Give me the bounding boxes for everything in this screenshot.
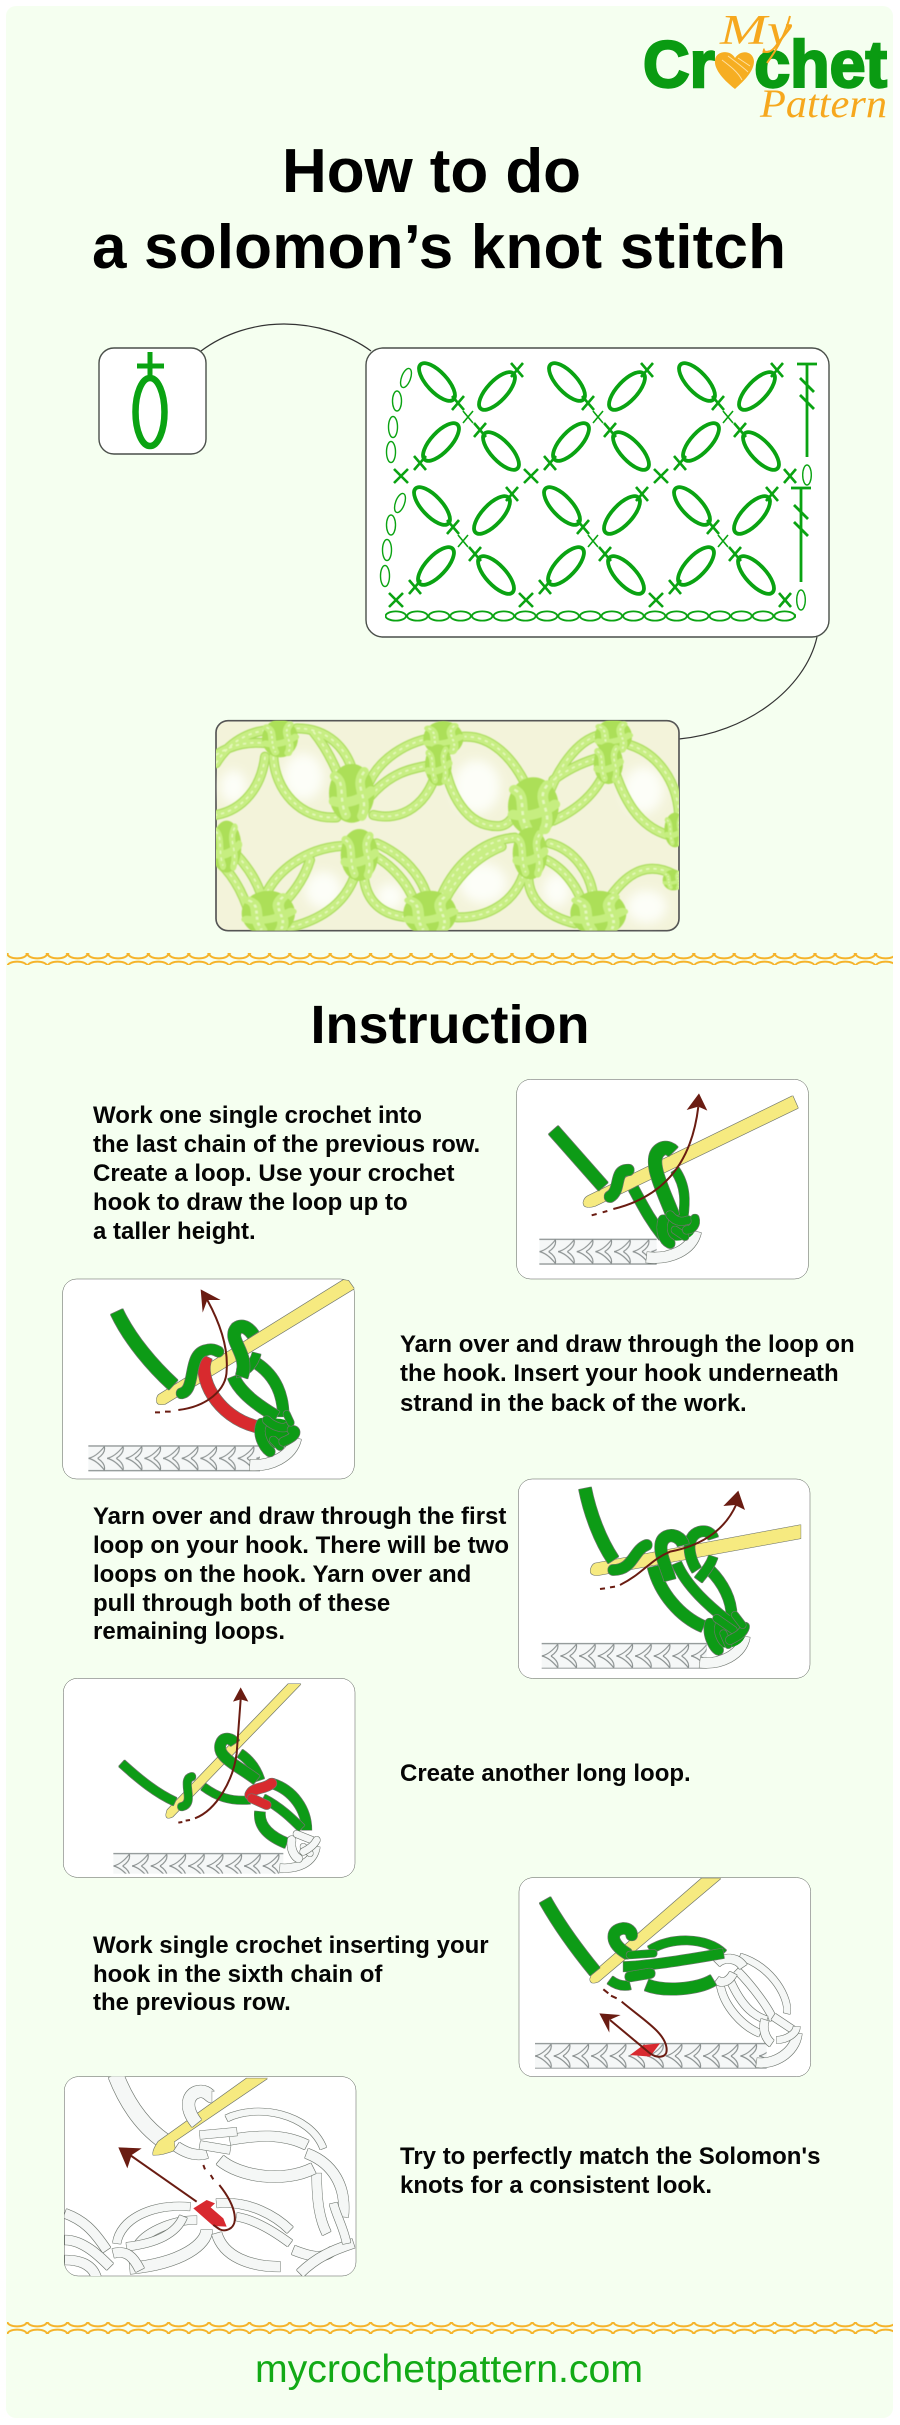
logo: My Crochet Pattern bbox=[643, 8, 887, 126]
red target stitch bbox=[630, 2043, 660, 2057]
chart: left turning chains bbox=[380, 367, 414, 586]
yarn bbox=[545, 1900, 723, 1989]
step 1 text: the last chain of the previous row. bbox=[93, 1131, 480, 1158]
step 1 text: a taller height. bbox=[93, 1218, 256, 1245]
yarn and red knot bbox=[122, 1739, 317, 1858]
arrow bbox=[118, 2147, 235, 2230]
step 3 text: loop on your hook. There will be two bbox=[93, 1532, 509, 1559]
hook bbox=[590, 1525, 801, 1575]
chain bbox=[539, 1232, 696, 1265]
working loops bbox=[177, 2091, 237, 2155]
red target stitch bbox=[193, 2200, 227, 2227]
step 5 illustration bbox=[519, 1878, 811, 2077]
chain bbox=[88, 1438, 296, 1472]
chain bbox=[113, 1847, 316, 1874]
completed white loops bbox=[717, 1957, 797, 2043]
step 5 text: hook in the sixth chain of bbox=[93, 1961, 383, 1988]
step 1 text: Work one single crochet into bbox=[93, 1102, 422, 1129]
step 4 text: Create another long loop. bbox=[400, 1760, 691, 1787]
divider: lower chain bbox=[7, 2322, 893, 2334]
connector: symbol to chart bbox=[201, 324, 371, 351]
step 1 text: hook to draw the loop up to bbox=[93, 1189, 408, 1216]
divider: upper chain bbox=[7, 953, 893, 965]
chain bbox=[535, 2033, 797, 2069]
step 6 text: Try to perfectly match the Solomon's bbox=[400, 2143, 820, 2170]
step 6 illustration bbox=[64, 2075, 356, 2278]
yarn bbox=[585, 1488, 746, 1650]
title bbox=[92, 137, 786, 282]
step 2 text bbox=[400, 1331, 855, 1417]
logo: My Crochet Pattern: My bbox=[719, 8, 792, 54]
step 5 text: Work single crochet inserting your bbox=[93, 1932, 489, 1959]
chart: lower row of knots bbox=[389, 482, 791, 607]
arrow bbox=[178, 1687, 248, 1823]
chart: upper row of knots bbox=[394, 358, 796, 483]
white stitches bbox=[65, 2075, 353, 2278]
step 3 text: Yarn over and draw through the first bbox=[93, 1503, 506, 1530]
step 3 text: loops on the hook. Yarn over and bbox=[93, 1561, 471, 1588]
step 3 text: remaining loops. bbox=[93, 1618, 285, 1645]
title: How to do bbox=[282, 137, 581, 206]
hook bbox=[590, 1878, 721, 1983]
arrow bbox=[592, 1093, 707, 1215]
logo: My Crochet Pattern: Pattern bbox=[759, 81, 887, 126]
step 5 text bbox=[93, 1932, 489, 2016]
footer: website address: mycrochetpattern.com bbox=[255, 2348, 643, 2391]
logo: My Crochet Pattern: Crochet bbox=[643, 27, 887, 101]
step 6 text bbox=[400, 2143, 820, 2199]
yarn bbox=[553, 1130, 696, 1243]
arrow bbox=[600, 1491, 745, 1589]
hook bbox=[157, 1280, 354, 1404]
yarn and red loop bbox=[117, 1312, 297, 1452]
step 4 illustration bbox=[63, 1678, 355, 1877]
arrow bbox=[155, 1289, 227, 1412]
photo: crocheted solomon's knot swatch bbox=[212, 719, 686, 936]
step 1 text bbox=[93, 1102, 480, 1245]
panel: stitch chart bbox=[366, 348, 829, 637]
step 2 text: strand in the back of the work. bbox=[400, 1390, 747, 1417]
step 2 text: Yarn over and draw through the loop on bbox=[400, 1331, 855, 1358]
arrow bbox=[599, 1989, 667, 2057]
chart: right edge posts bbox=[791, 364, 817, 610]
heading: Instruction: Instruction bbox=[310, 995, 590, 1055]
chart: foundation chain bbox=[385, 610, 796, 622]
chain bbox=[542, 1637, 745, 1669]
step 1 text: Create a loop. Use your crochet bbox=[93, 1160, 454, 1187]
hook bbox=[153, 2078, 267, 2155]
step 3 text bbox=[93, 1503, 509, 1645]
step 2 text: the hook. Insert your hook underneath bbox=[400, 1360, 839, 1387]
step 6 text: knots for a consistent look. bbox=[400, 2172, 712, 2199]
step 3 illustration bbox=[518, 1479, 810, 1678]
step 1 illustration bbox=[517, 1079, 808, 1279]
step 2 illustration bbox=[63, 1279, 354, 1479]
hook bbox=[166, 1684, 301, 1818]
step 5 text: the previous row. bbox=[93, 1989, 291, 2016]
title: a solomon’s knot stitch bbox=[92, 213, 786, 282]
step 3 text: pull through both of these bbox=[93, 1590, 390, 1617]
panel: single stitch symbol bbox=[99, 348, 206, 454]
hook bbox=[583, 1096, 798, 1207]
connector: chart to photo bbox=[679, 637, 817, 739]
